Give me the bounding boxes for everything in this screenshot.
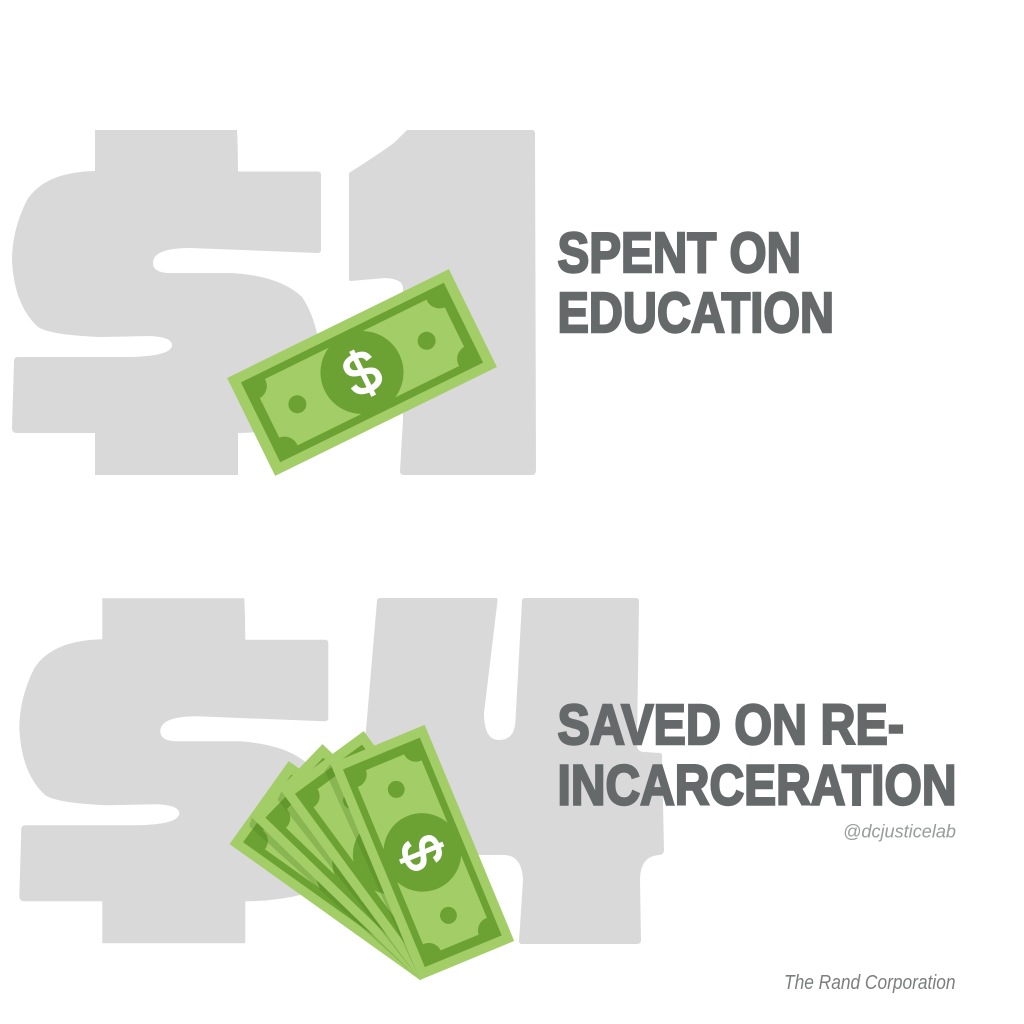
big grey figure: $4 [19,598,664,944]
dollar bill: single note: $ [332,336,392,410]
big grey figure: $1 [12,130,536,475]
heading: spent on education: EDUCATION [558,281,834,345]
note 3 [246,744,491,986]
source credit: The Rand Corporation [784,972,956,994]
dollar bill: single note [227,269,497,476]
heading: saved on re-incarceration: SAVED ON RE- [558,693,904,757]
heading: spent on education: SPENT ON [558,221,801,285]
note 1 (front) [323,725,514,983]
heading: spent on education [558,221,834,345]
heading: saved on re-incarceration [558,693,956,818]
heading: saved on re-incarceration: INCARCERATION [558,754,956,818]
note 2 [275,731,502,985]
dollar bills: fan of four notes [230,725,514,986]
note 1 (front): $ [387,826,457,879]
handle credit: @dcjusticelab [843,822,956,842]
note 4 (back) [230,761,479,980]
